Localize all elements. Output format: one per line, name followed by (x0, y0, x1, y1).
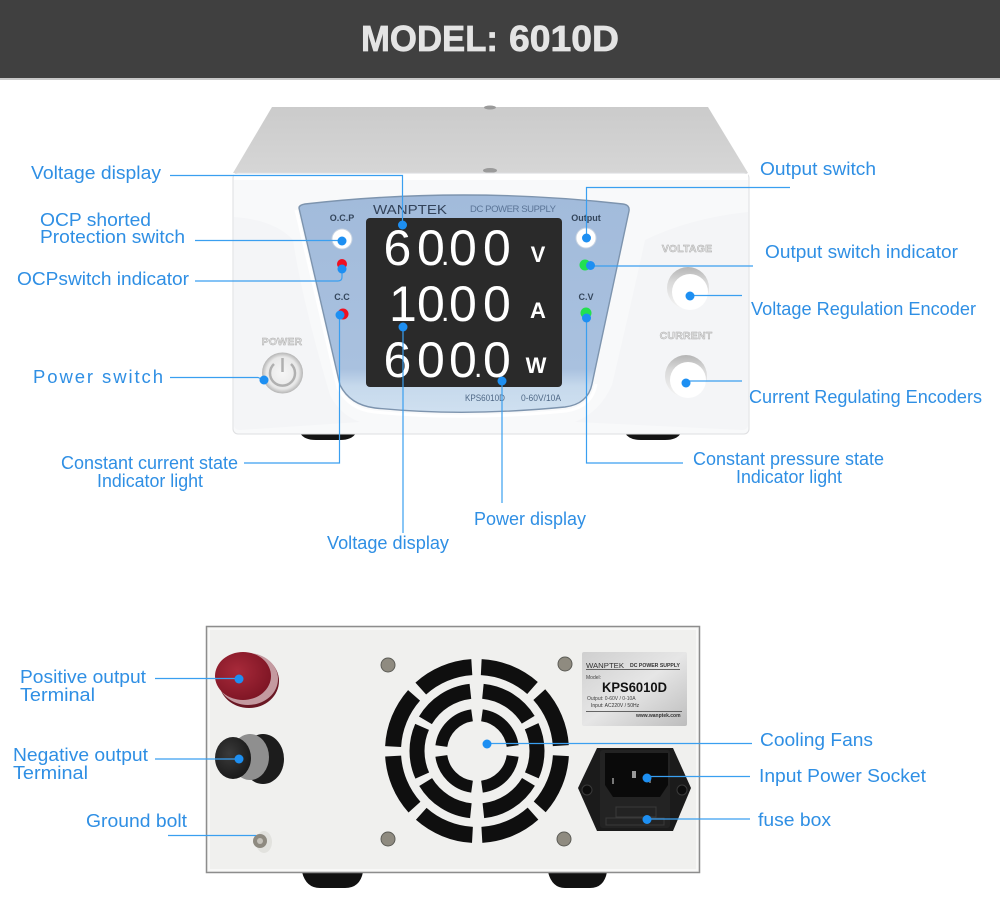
callout: voltage regulation encoder: Voltage Regulation Encoder (751, 298, 976, 319)
power socket and fuse module (578, 748, 691, 831)
front panel (299, 195, 629, 412)
callout: voltage display lower (327, 322, 450, 553)
voltage reading: 6 (384, 220, 411, 276)
callout: OCP shorted protection switch (40, 209, 346, 247)
callout: voltage display (31, 162, 407, 230)
unit letters: W (526, 353, 547, 378)
power reading: 0 (417, 332, 445, 388)
callout: current regulating encoders: Current Regulating Encoders (749, 386, 982, 407)
callout: cooling fans (482, 729, 873, 750)
callout: power switch: Power switch (33, 366, 163, 387)
top cover (233, 107, 748, 173)
callout: constant pressure state indicator light (582, 314, 884, 487)
fan screws (381, 657, 572, 846)
right recess (575, 212, 748, 430)
callout: ground bolt: Ground bolt (86, 810, 187, 831)
ground bolt (253, 831, 272, 853)
current reading: 1 (389, 276, 417, 332)
panel labels: C.V (578, 292, 594, 302)
front view of power supply (233, 106, 749, 440)
callout: output switch: Output switch (760, 158, 876, 179)
callout: constant current state indicator light: Constant current state (61, 452, 238, 473)
brand logo: WANPTEK (373, 202, 447, 217)
voltage reading: . (441, 239, 449, 272)
callout: OCP switch indicator: OCPswitch indicator (17, 268, 189, 289)
callout: fuse box: fuse box (758, 809, 832, 830)
cooling fan grille (393, 667, 561, 835)
current reading: 0 (449, 276, 477, 332)
power button (262, 352, 303, 394)
callout: power switch (33, 366, 268, 387)
voltage knob (667, 267, 709, 310)
rating label: DC POWER SUPPLY (630, 663, 680, 669)
embossed control labels: CURRENT (660, 330, 713, 342)
power reading: 6 (384, 332, 411, 388)
current knob (665, 355, 707, 398)
callout: constant pressure state indicator light: Indicator light (736, 466, 842, 487)
callout: output switch (582, 158, 876, 242)
rating label: Output: 0-60V / 0-10A (587, 696, 636, 702)
model text: KPS6010D (465, 393, 505, 403)
rating label: WANPTEK (586, 661, 624, 670)
callout: positive output terminal: Positive output (20, 666, 146, 687)
voltage reading: 0 (449, 220, 477, 276)
unit letters: A (530, 298, 546, 323)
callout: fuse box (642, 809, 832, 830)
embossed control labels (262, 243, 713, 348)
voltage reading: 0 (417, 220, 445, 276)
rating label (582, 652, 687, 726)
callout: voltage display lower: Voltage display (327, 532, 450, 553)
model text: 0-60V/10A (521, 393, 561, 403)
callout: negative output terminal: Terminal (13, 762, 88, 783)
callout: current regulating encoders (682, 378, 982, 407)
negative terminal (215, 734, 284, 784)
callout: voltage display: Voltage display (31, 162, 162, 183)
callout: OCP shorted protection switch: OCP shorted (40, 209, 151, 230)
display screen (366, 218, 562, 388)
voltage reading: 0 (483, 220, 511, 276)
rating label: Model: (586, 675, 601, 681)
feet (300, 433, 681, 440)
callout: OCP switch indicator (17, 264, 346, 289)
current reading: 0 (417, 276, 445, 332)
panel labels (330, 213, 601, 302)
model text (465, 393, 561, 403)
title: MODEL: (361, 18, 498, 59)
callout: power display (474, 376, 587, 529)
power reading: 0 (449, 332, 477, 388)
title: 6010D (509, 18, 619, 59)
panel labels: C.C (334, 292, 350, 302)
power reading: . (474, 351, 482, 384)
callout: constant pressure state indicator light: Constant pressure state (693, 448, 884, 469)
socket recess (605, 753, 668, 797)
unit letters: V (531, 242, 546, 267)
callout: OCP shorted protection switch: Protection switch (40, 226, 185, 247)
callout: input power socket: Input Power Socket (759, 765, 926, 786)
rear feet (302, 872, 607, 888)
rear plate (206, 626, 700, 872)
header banner (0, 0, 1000, 80)
callout: constant current state indicator light: Indicator light (97, 470, 203, 491)
OCP and output buttons (332, 228, 596, 249)
callout: positive output terminal: Terminal (20, 684, 95, 705)
rating label: Input: AC220V / 50Hz (591, 703, 640, 709)
callout: output switch indicator: Output switch indicator (765, 241, 958, 262)
panel labels: Output (571, 213, 601, 223)
fuse drawer (606, 807, 664, 825)
rating label: www.wanptek.com (635, 713, 681, 719)
embossed control labels: POWER (262, 336, 303, 348)
callout: positive output terminal (20, 666, 244, 705)
callout: voltage regulation encoder (686, 292, 976, 319)
current reading: . (441, 295, 449, 328)
panel labels: O.C.P (330, 213, 354, 223)
rear view of power supply (206, 626, 700, 888)
unit letters (526, 242, 547, 378)
rating label: KPS6010D (602, 680, 667, 695)
callout: negative output terminal (13, 744, 244, 783)
indicator lights (337, 259, 592, 320)
embossed control labels: VOLTAGE (662, 243, 712, 255)
top screws (483, 106, 497, 173)
callout: output switch indicator (586, 241, 958, 270)
callout: cooling fans: Cooling Fans (760, 729, 873, 750)
panel heading: DC POWER SUPPLY (470, 204, 557, 215)
callout: negative output terminal: Negative output (13, 744, 148, 765)
callout: power display: Power display (474, 508, 587, 529)
callout: input power socket (642, 765, 926, 786)
left recess (234, 217, 360, 430)
power reading: 0 (483, 332, 511, 388)
current reading: 0 (483, 276, 511, 332)
callout: constant current state indicator light (61, 310, 344, 491)
positive terminal (215, 652, 279, 708)
front body (233, 173, 749, 434)
